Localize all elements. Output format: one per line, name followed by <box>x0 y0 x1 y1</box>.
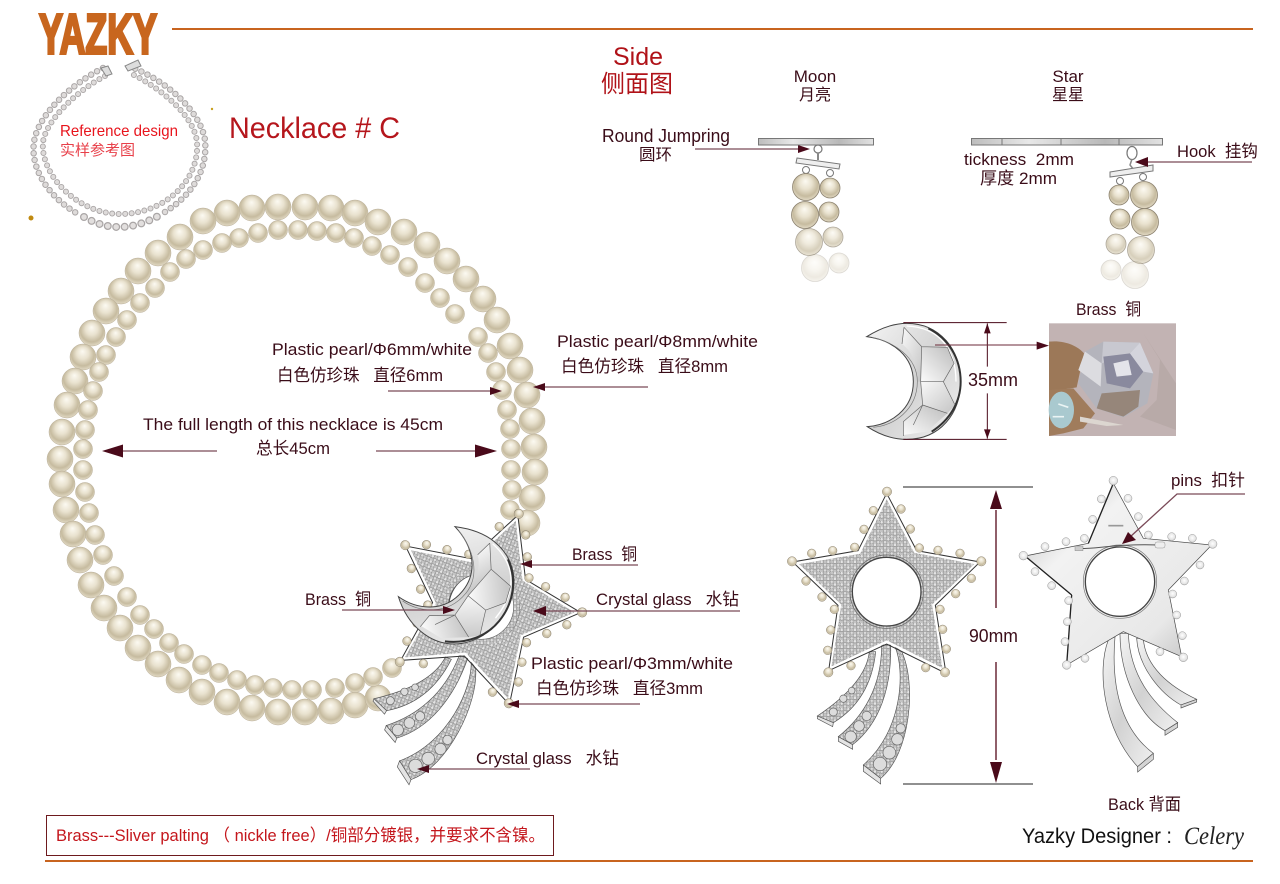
reference design label: 实样参考图 <box>60 142 135 159</box>
label: round jumpring <box>602 126 810 164</box>
label: hook: Hook 挂钩 <box>1177 142 1258 161</box>
label: pins: pins 扣针 <box>1171 471 1245 490</box>
note box <box>46 816 554 856</box>
label: back: Back 背面 <box>1108 795 1181 814</box>
dimension: 90mm: 90mm <box>969 626 1018 646</box>
front star pendant <box>787 487 986 784</box>
label: hook <box>1135 142 1258 167</box>
moon detail with 35mm dimension <box>867 323 1049 439</box>
label: 3mm pearl <box>507 654 733 708</box>
label: crystal glass on star: Crystal glass 水钻 <box>596 590 739 609</box>
label: thickness: 厚度 2mm <box>980 169 1057 188</box>
heading: moon <box>794 67 836 104</box>
reference design label <box>60 123 178 159</box>
header rule <box>172 28 1253 30</box>
heading: star <box>1052 67 1084 104</box>
label: brass moon: Brass 铜 <box>305 590 371 609</box>
designer credit <box>1022 823 1245 850</box>
necklace outer strand <box>47 194 548 725</box>
photo: crystal on fingers <box>1049 323 1176 436</box>
designer credit: Yazky Designer : <box>1022 825 1172 848</box>
back star pendant <box>1019 476 1217 772</box>
label: thickness: tickness 2mm <box>964 150 1074 169</box>
label: round jumpring: 圆环 <box>639 147 672 164</box>
label: round jumpring: Round Jumpring <box>602 126 730 146</box>
label: 8mm pearl: 白色仿珍珠 直径8mm <box>561 357 728 376</box>
footer rule <box>45 860 1253 862</box>
heading: moon: 月亮 <box>799 86 831 104</box>
label: crystal glass on tail <box>417 749 619 773</box>
label: 6mm pearl <box>272 340 502 395</box>
heading: side view: Side <box>613 43 663 71</box>
heading: star: Star <box>1052 67 1084 86</box>
side view: star pendant <box>972 138 1162 288</box>
logo: YAZKY: YAZKY <box>39 2 157 66</box>
dimension: 90mm <box>903 487 1033 784</box>
label: brass upper: Brass 铜 <box>572 545 637 564</box>
necklace inner strand <box>74 220 522 700</box>
label: full length: 总长45cm <box>256 439 330 458</box>
label: brass photo: Brass 铜 <box>1076 300 1141 319</box>
label: full length <box>102 415 497 458</box>
label: 8mm pearl <box>533 332 758 391</box>
heading: side view <box>601 43 673 98</box>
side view: moon pendant <box>758 138 874 282</box>
heading: moon: Moon <box>794 67 836 86</box>
title: Necklace # C: Necklace # C <box>229 112 400 145</box>
note box: Brass---Sliver palting （ nickle free）/铜部分镀银，并要求不含镍。 <box>56 826 545 845</box>
label: 8mm pearl: Plastic pearl/Φ8mm/white <box>557 332 758 351</box>
heading: star: 星星 <box>1052 87 1084 104</box>
dimension label: 35mm: 35mm <box>968 370 1018 390</box>
label: pins <box>1122 471 1245 544</box>
label: 3mm pearl: Plastic pearl/Φ3mm/white <box>531 654 733 673</box>
heading: side view: 侧面图 <box>601 71 673 98</box>
label: full length: The full length of this necklace is 45cm <box>143 415 443 434</box>
main pendant: star with moon <box>322 474 613 822</box>
label: thickness <box>964 150 1074 188</box>
designer credit: Celery <box>1184 823 1245 850</box>
label: brass upper <box>520 545 638 568</box>
label: crystal glass on star <box>533 590 740 616</box>
label: crystal glass on tail: Crystal glass 水钻 <box>476 749 619 768</box>
label: 6mm pearl: 白色仿珍珠 直径6mm <box>277 366 443 385</box>
reference necklace photo <box>28 60 213 227</box>
reference design label: Reference design <box>60 123 178 140</box>
label: 6mm pearl: Plastic pearl/Φ6mm/white <box>272 340 472 359</box>
label: 3mm pearl: 白色仿珍珠 直径3mm <box>536 679 703 698</box>
label: brass moon <box>305 590 455 614</box>
